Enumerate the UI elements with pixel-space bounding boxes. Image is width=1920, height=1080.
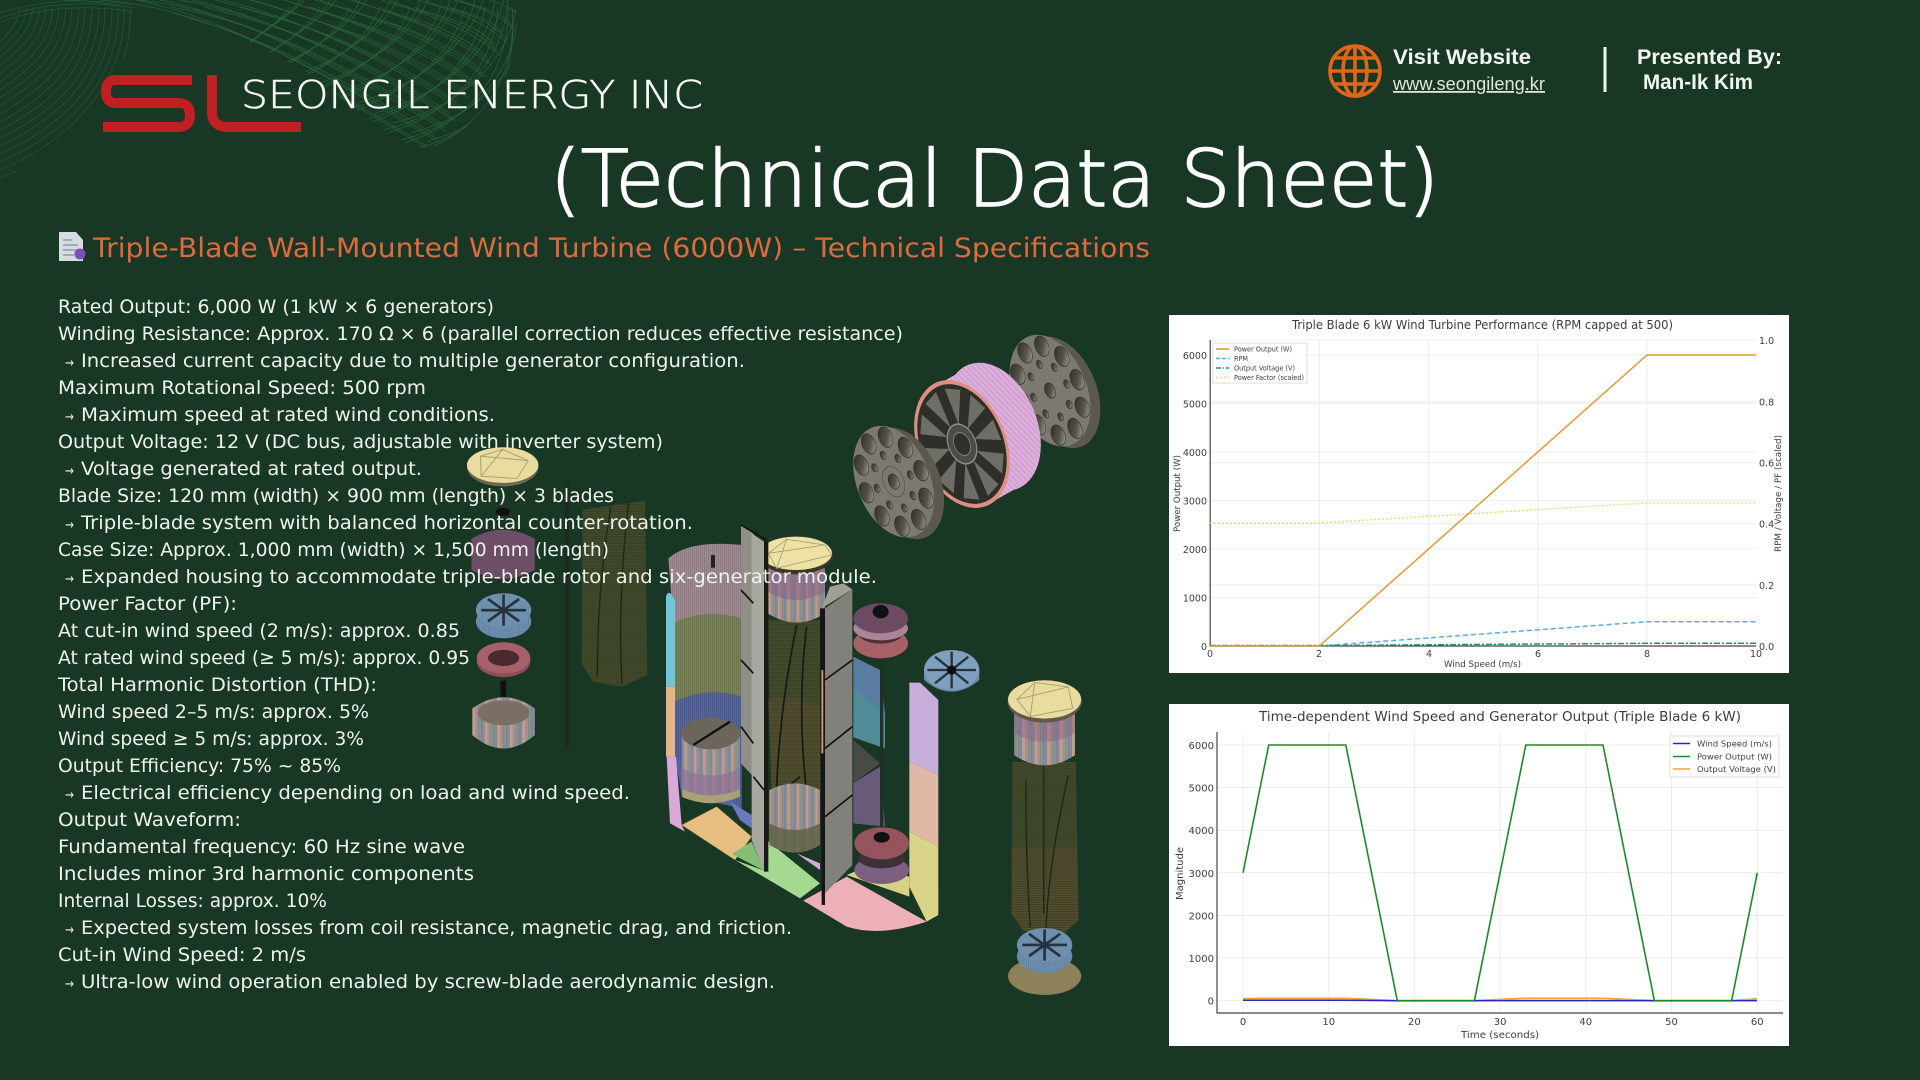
legend: Output Voltage (V)	[1234, 364, 1295, 372]
specifications text block: Fundamental frequency: 60 Hz sine wave	[58, 836, 465, 858]
open turbine case	[666, 525, 979, 931]
specifications text block: At cut-in wind speed (2 m/s): approx. 0.85	[58, 620, 460, 642]
specifications text block: Voltage generated at rated output.	[81, 458, 422, 480]
legend: Power Output (W)	[1697, 752, 1772, 762]
axis labels: 6	[1535, 649, 1541, 660]
axis labels: 0.8	[1759, 398, 1774, 408]
axis labels: 6000	[1189, 741, 1214, 752]
left gray folded panel	[741, 525, 768, 872]
axis labels: 6000	[1183, 351, 1207, 362]
specifications text block: Electrical efficiency depending on load and wind speed.	[81, 782, 630, 804]
axis labels: Triple Blade 6 kW Wind Turbine Performance (RPM capped at 500)	[1291, 318, 1673, 332]
axis labels: 0	[1207, 649, 1213, 660]
chart: time-dependent output	[1169, 704, 1789, 1046]
specifications text block: Maximum speed at rated wind conditions.	[81, 404, 495, 426]
icon: globe	[1330, 46, 1380, 96]
axis labels: Wind Speed (m/s)	[1444, 660, 1521, 670]
specifications text block: Output Voltage: 12 V (DC bus, adjustable with inverter system)	[58, 431, 663, 453]
exploded rotor, top right	[838, 323, 1116, 551]
inner right panels and shaft	[853, 657, 885, 828]
company logo	[103, 73, 703, 127]
axis labels: 60	[1751, 1017, 1764, 1028]
axis labels: 50	[1665, 1017, 1678, 1028]
axis labels: 1.0	[1759, 336, 1774, 347]
legend	[1213, 343, 1307, 383]
specifications text block: Power Factor (PF):	[58, 593, 237, 615]
series: output voltage	[1210, 643, 1756, 646]
series: power output	[1243, 745, 1757, 1001]
specifications text block: Maximum Rotational Speed: 500 rpm	[58, 377, 426, 399]
specifications text block: Includes minor 3rd harmonic components	[58, 863, 474, 885]
series: power output	[1210, 355, 1756, 646]
axis labels: 0.6	[1759, 458, 1774, 470]
specifications text block: →	[65, 572, 74, 587]
specifications text block: Winding Resistance: Approx. 170 Ω × 6 (parallel correction reduces effective resistance)	[58, 323, 903, 345]
back wall bands	[666, 544, 742, 832]
specifications text block: Wind speed ≥ 5 m/s: approx. 3%	[58, 728, 364, 750]
right side wall	[909, 683, 938, 922]
visit website label: Visit Website	[1393, 46, 1531, 69]
specifications text block: Cut-in Wind Speed: 2 m/s	[58, 944, 306, 966]
axis labels: 0.4	[1759, 520, 1774, 530]
series: wind speed	[1243, 999, 1757, 1002]
axis labels: 0.0	[1759, 642, 1774, 653]
specifications text block: →	[65, 356, 74, 371]
central turbine	[759, 536, 833, 852]
specifications text block: Triple-blade system with balanced horizontal counter-rotation.	[80, 512, 693, 534]
axis labels: RPM / Voltage / PF (scaled)	[1774, 435, 1784, 552]
presenter block	[1637, 46, 1782, 94]
specifications text block: →	[65, 923, 74, 938]
upper rotor pair	[853, 603, 908, 658]
axis labels: Magnitude	[1175, 847, 1186, 900]
specifications text block: Blade Size: 120 mm (width) × 900 mm (length) × 3 blades	[58, 485, 614, 507]
right gray folded panel	[820, 583, 852, 905]
axis labels: 0	[1208, 997, 1214, 1008]
decorative mesh wave	[0, 0, 533, 178]
section heading: Triple-Blade Wall-Mounted Wind Turbine (6000W) – Technical Specifications	[92, 233, 1150, 264]
axis labels: 0	[1240, 1017, 1246, 1028]
icon: SL mark	[103, 75, 301, 127]
specifications text block: Internal Losses: approx. 10%	[58, 890, 327, 912]
rotor ring	[896, 348, 1059, 522]
specifications text block: At rated wind speed (≥ 5 m/s): approx. 0.95	[58, 647, 470, 669]
right assembled turbine	[1008, 680, 1082, 995]
specifications text block: →	[65, 464, 74, 479]
axis labels: 3000	[1189, 869, 1214, 880]
specifications text block: →	[65, 977, 74, 992]
axis labels: 40	[1579, 1017, 1592, 1028]
grid	[1217, 732, 1783, 1013]
specifications text block	[57, 296, 903, 993]
axis labels: 2	[1316, 649, 1322, 660]
legend: RPM	[1234, 355, 1248, 363]
legend: Output Voltage (V)	[1697, 765, 1776, 774]
axis labels: 1000	[1183, 594, 1207, 604]
left exploded stack	[467, 447, 647, 749]
website url: www.seongileng.kr	[1392, 74, 1545, 94]
specifications text block: Expanded housing to accommodate triple-blade rotor and six-generator module.	[81, 566, 877, 588]
right end disc	[994, 323, 1116, 460]
series: rpm	[1319, 622, 1756, 646]
series: output voltage	[1243, 998, 1757, 1001]
axis labels: 2000	[1189, 911, 1214, 922]
left generator	[681, 555, 740, 803]
axis labels: 5000	[1189, 784, 1214, 795]
legend: Power Factor (scaled)	[1234, 374, 1304, 382]
specifications text block: Output Efficiency: 75% ~ 85%	[58, 755, 341, 777]
specifications text block: Case Size: Approx. 1,000 mm (width) × 1,500 mm (length)	[58, 539, 609, 561]
legend	[1670, 736, 1779, 777]
axis labels: 30	[1494, 1017, 1506, 1028]
specifications text block: →	[65, 518, 74, 533]
axis labels: 2000	[1183, 545, 1207, 556]
specifications text block: Wind speed 2–5 m/s: approx. 5%	[58, 701, 369, 723]
axis labels: 4000	[1189, 826, 1214, 837]
axis labels	[1173, 318, 1784, 670]
specifications text block: →	[65, 410, 74, 425]
presenter block: Man-Ik Kim	[1643, 71, 1753, 94]
axis labels: 8	[1644, 649, 1650, 660]
icon: document	[59, 232, 86, 261]
axis labels: 0.2	[1759, 581, 1774, 592]
axis labels: Time-dependent Wind Speed and Generator Output (Triple Blade 6 kW)	[1258, 709, 1741, 725]
detached blue rotor	[924, 650, 979, 692]
axis labels: 4000	[1183, 448, 1207, 459]
axis labels: 5000	[1183, 400, 1207, 410]
specifications text block: Expected system losses from coil resistance, magnetic drag, and friction.	[81, 917, 792, 939]
left end disc	[838, 414, 960, 551]
axis labels: Time (seconds)	[1460, 1030, 1539, 1041]
axis labels	[1175, 709, 1764, 1041]
axis labels: 10	[1750, 649, 1762, 660]
specifications text block: Total Harmonic Distortion (THD):	[57, 674, 377, 696]
axis labels: 20	[1408, 1017, 1421, 1028]
grid	[1210, 340, 1756, 646]
title: (Technical Data Sheet)	[550, 135, 1439, 225]
axis labels: Power Output (W)	[1173, 455, 1183, 532]
axis labels: 0	[1201, 642, 1207, 653]
series: power factor	[1210, 503, 1756, 523]
left exploded stack and right assembled turbine	[467, 447, 1082, 995]
specifications text block: →	[65, 788, 74, 803]
lower rotor pair	[854, 827, 909, 884]
axis labels: 3000	[1183, 496, 1207, 508]
axis labels: 4	[1426, 649, 1432, 660]
specifications text block: Ultra-low wind operation enabled by screw-blade aerodynamic design.	[81, 971, 775, 993]
axis labels: 10	[1322, 1017, 1335, 1028]
presenter block: Presented By:	[1637, 46, 1782, 69]
company name: SEONGIL ENERGY INC	[241, 73, 703, 117]
legend: Power Output (W)	[1234, 346, 1292, 354]
specifications text block: Increased current capacity due to multiple generator configuration.	[81, 350, 745, 372]
axis labels: 1000	[1189, 954, 1214, 965]
website block	[1330, 46, 1545, 96]
floor panels	[682, 802, 927, 931]
specifications text block: Rated Output: 6,000 W (1 kW × 6 generators)	[58, 296, 494, 318]
chart: wind turbine performance	[1169, 315, 1789, 673]
legend: Wind Speed (m/s)	[1697, 740, 1772, 748]
specifications text block: Output Waveform:	[58, 809, 241, 831]
